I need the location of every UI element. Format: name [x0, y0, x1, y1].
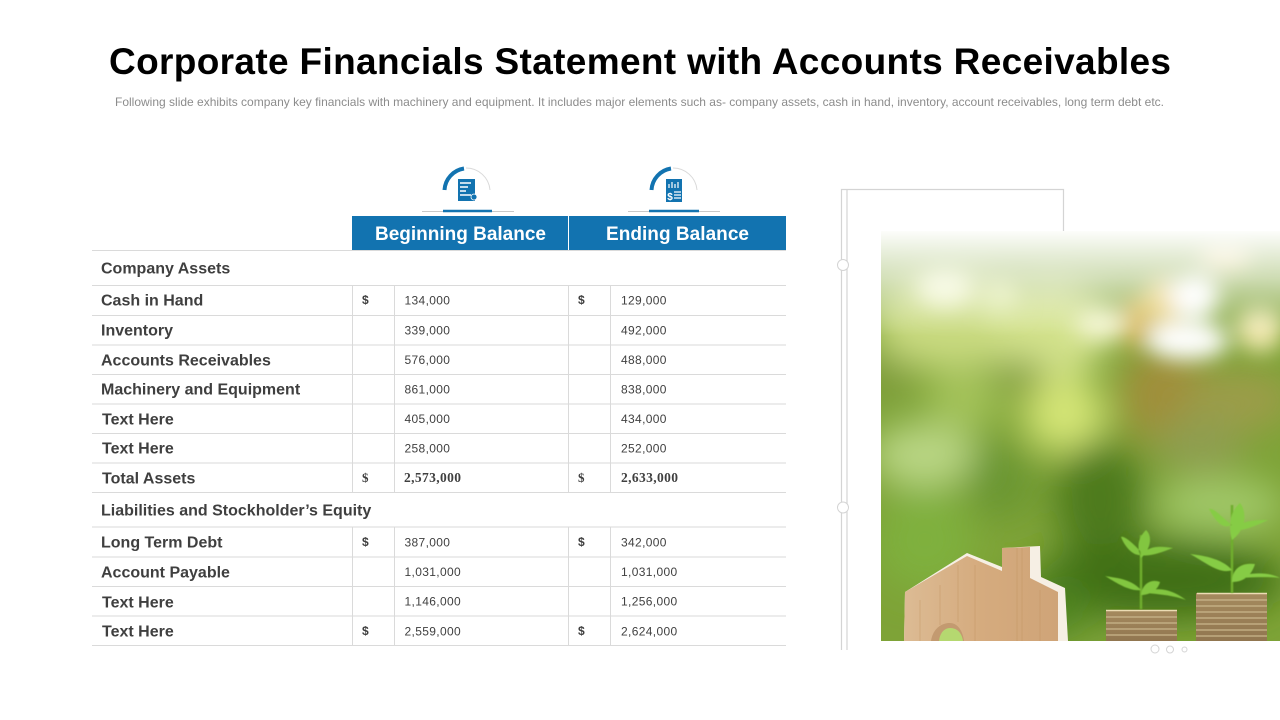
row: Machinery and Equipment: 861,000: [404, 382, 450, 396]
row: Long Term Debt: 387,000: [404, 536, 450, 550]
row: Total Assets: Total Assets: [102, 470, 195, 488]
row: Text Here: 258,000: [404, 442, 450, 456]
row: Text Here: 434,000: [621, 412, 667, 426]
table header: Beginning Balance: Beginning Balance: [375, 224, 546, 245]
row: Text Here: 2,559,000: [404, 624, 461, 638]
table header: Beginning Balance: [352, 216, 568, 250]
row: Text Here: 1,256,000: [621, 594, 678, 608]
row: Account Payable: 1,031,000: [621, 565, 678, 579]
row: Long Term Debt: Long Term Debt: [101, 534, 223, 552]
row: Text Here: $: [578, 624, 585, 638]
row: Inventory: 492,000: [621, 324, 667, 338]
row: Total Assets: $: [362, 470, 369, 485]
row: Cash in Hand: $: [578, 293, 585, 307]
icon: ending balance report: [628, 168, 720, 212]
row: Text Here: Text Here: [102, 594, 174, 612]
row: Total Assets: 2,573,000: [404, 470, 461, 485]
row: Cash in Hand: 134,000: [404, 294, 450, 308]
row: Total Assets: $: [578, 470, 585, 485]
subtitle description: Following slide exhibits company key financials with machinery and equipment. It includes major elements such as- company assets, cash in hand, inventory, account receivables, long term debt etc.: [115, 95, 1164, 109]
row: Long Term Debt: $: [578, 535, 585, 549]
icon: ending balance report: $: [667, 192, 673, 203]
row: Text Here: [102, 624, 678, 640]
row: Long Term Debt: [101, 534, 667, 552]
icon: beginning balance document: [422, 168, 514, 212]
row: Total Assets: [102, 470, 678, 488]
row: Cash in Hand: [101, 292, 667, 310]
row: Long Term Debt: 342,000: [621, 536, 667, 550]
row: Cash in Hand: $: [362, 293, 369, 307]
photo coin stacks: [1106, 593, 1267, 641]
row: Text Here: [102, 412, 667, 428]
section: Company Assets: Company Assets: [101, 260, 230, 278]
row: Text Here: [102, 594, 678, 612]
row: Cash in Hand: Cash in Hand: [101, 292, 203, 310]
row: Text Here: Text Here: [102, 624, 174, 640]
small decorative circles under photo: [1151, 645, 1187, 653]
table header: Ending Balance: [569, 216, 786, 250]
table header: Ending Balance: Ending Balance: [606, 224, 749, 245]
row: Inventory: 339,000: [404, 324, 450, 338]
row: Inventory: Inventory: [101, 322, 173, 340]
row: Accounts Receivables: Accounts Receivables: [101, 352, 271, 370]
row: Text Here: [102, 440, 667, 458]
row: Accounts Receivables: 488,000: [621, 353, 667, 367]
row: Text Here: Text Here: [102, 412, 174, 428]
row: Text Here: 252,000: [621, 442, 667, 456]
row: Accounts Receivables: 576,000: [404, 353, 450, 367]
financial table: [92, 250, 786, 646]
decorative frame behind photo: [838, 190, 1064, 650]
row: Long Term Debt: $: [362, 535, 369, 549]
photo wooden house: [904, 546, 1068, 641]
row: Text Here: 2,624,000: [621, 624, 678, 638]
row: Machinery and Equipment: [101, 382, 667, 398]
row: Cash in Hand: 129,000: [621, 294, 667, 308]
row: Inventory: [101, 322, 667, 340]
row: Text Here: 405,000: [404, 412, 450, 426]
row: Accounts Receivables: [101, 352, 667, 370]
row: Machinery and Equipment: Machinery and Equipment: [101, 382, 301, 398]
row: Machinery and Equipment: 838,000: [621, 382, 667, 396]
photo: wooden house and coin stacks with seedlings: [866, 231, 1280, 641]
table grid lines: [92, 250, 786, 646]
row: Account Payable: Account Payable: [101, 564, 230, 582]
row: Text Here: 1,146,000: [404, 594, 461, 608]
title: Corporate Financials Statement with Accounts Receivables: [109, 41, 1171, 82]
row: Account Payable: [101, 564, 678, 582]
row: Account Payable: 1,031,000: [404, 565, 461, 579]
section: Liabilities and Stockholder's Equity: Liabilities and Stockholder’s Equity: [101, 502, 371, 520]
row: Total Assets: 2,633,000: [621, 470, 678, 485]
photo blurred background: [866, 231, 1280, 641]
photo seedlings: [1105, 503, 1280, 609]
row: Text Here: Text Here: [102, 440, 174, 458]
row: Text Here: $: [362, 624, 369, 638]
